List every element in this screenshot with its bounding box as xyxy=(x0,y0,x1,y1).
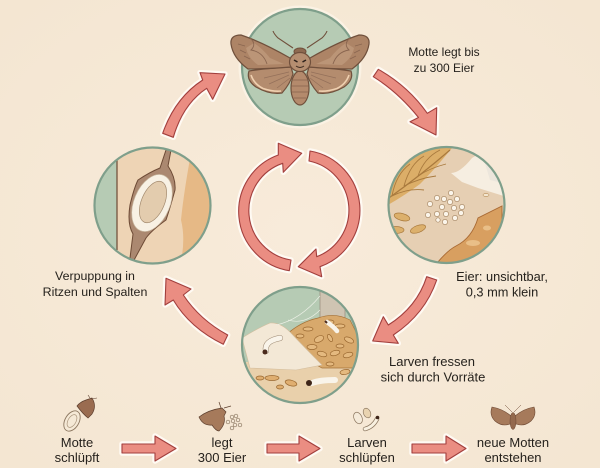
label: larvae hatch: Larven xyxy=(347,435,387,450)
arrow: inner cycle left xyxy=(239,143,302,271)
arrow: step one xyxy=(122,436,176,461)
panel: larvae circle xyxy=(240,285,360,405)
crack xyxy=(129,150,175,262)
label: lays eggs: 300 Eier xyxy=(198,450,247,465)
cocoon xyxy=(131,174,173,232)
label: moth lays eggs: Motte legt bis xyxy=(408,45,480,59)
flour mound xyxy=(242,323,322,370)
arrow: step three xyxy=(412,436,466,461)
sand floor xyxy=(246,362,352,402)
panel: moth circle xyxy=(231,8,369,126)
label: new moths emerge: entstehen xyxy=(484,450,542,465)
larvae xyxy=(266,338,280,351)
eggs xyxy=(425,190,465,225)
flour top right xyxy=(451,156,502,196)
icon: moth xyxy=(231,31,369,105)
label: larvae eat: sich durch Vorräte xyxy=(381,370,485,384)
grain pile xyxy=(286,315,360,368)
panel: eggs circle xyxy=(384,145,510,268)
label: lays eggs: legt xyxy=(212,435,232,450)
icon: larvae hatching xyxy=(352,407,379,429)
label: larvae eat: Larven fressen xyxy=(389,354,475,369)
label: pupation: Ritzen und Spalten xyxy=(43,285,147,299)
label: moth hatches: schlüpft xyxy=(55,450,100,465)
label: moth hatches: Motte xyxy=(61,435,93,450)
loose grains xyxy=(394,212,410,222)
arrow: pupa to moth xyxy=(163,73,225,137)
icon: moth hatching xyxy=(60,395,97,434)
label: eggs invisible: Eier: unsichtbar, xyxy=(456,269,548,284)
arrow: inner cycle right xyxy=(298,151,360,277)
arrow: step two xyxy=(267,436,320,461)
label: moth lays eggs: zu 300 Eier xyxy=(414,61,474,75)
web threads xyxy=(276,296,320,325)
label: pupation: Verpuppung in xyxy=(55,269,135,283)
label: larvae hatch: schlüpfen xyxy=(339,450,395,465)
arrow: moth to eggs xyxy=(373,69,437,135)
icon: moth with eggs xyxy=(199,402,242,431)
scattered grains xyxy=(256,376,298,389)
wheat ear xyxy=(390,148,452,204)
arrow: larvae to pupa xyxy=(165,278,228,344)
arrow: eggs to larvae xyxy=(373,277,437,343)
grain clump xyxy=(437,206,502,268)
label: new moths emerge: neue Motten xyxy=(477,435,549,450)
label: eggs invisible: 0,3 mm klein xyxy=(466,284,538,300)
panel: pupa circle xyxy=(92,146,215,266)
icon: new moth xyxy=(491,405,535,430)
